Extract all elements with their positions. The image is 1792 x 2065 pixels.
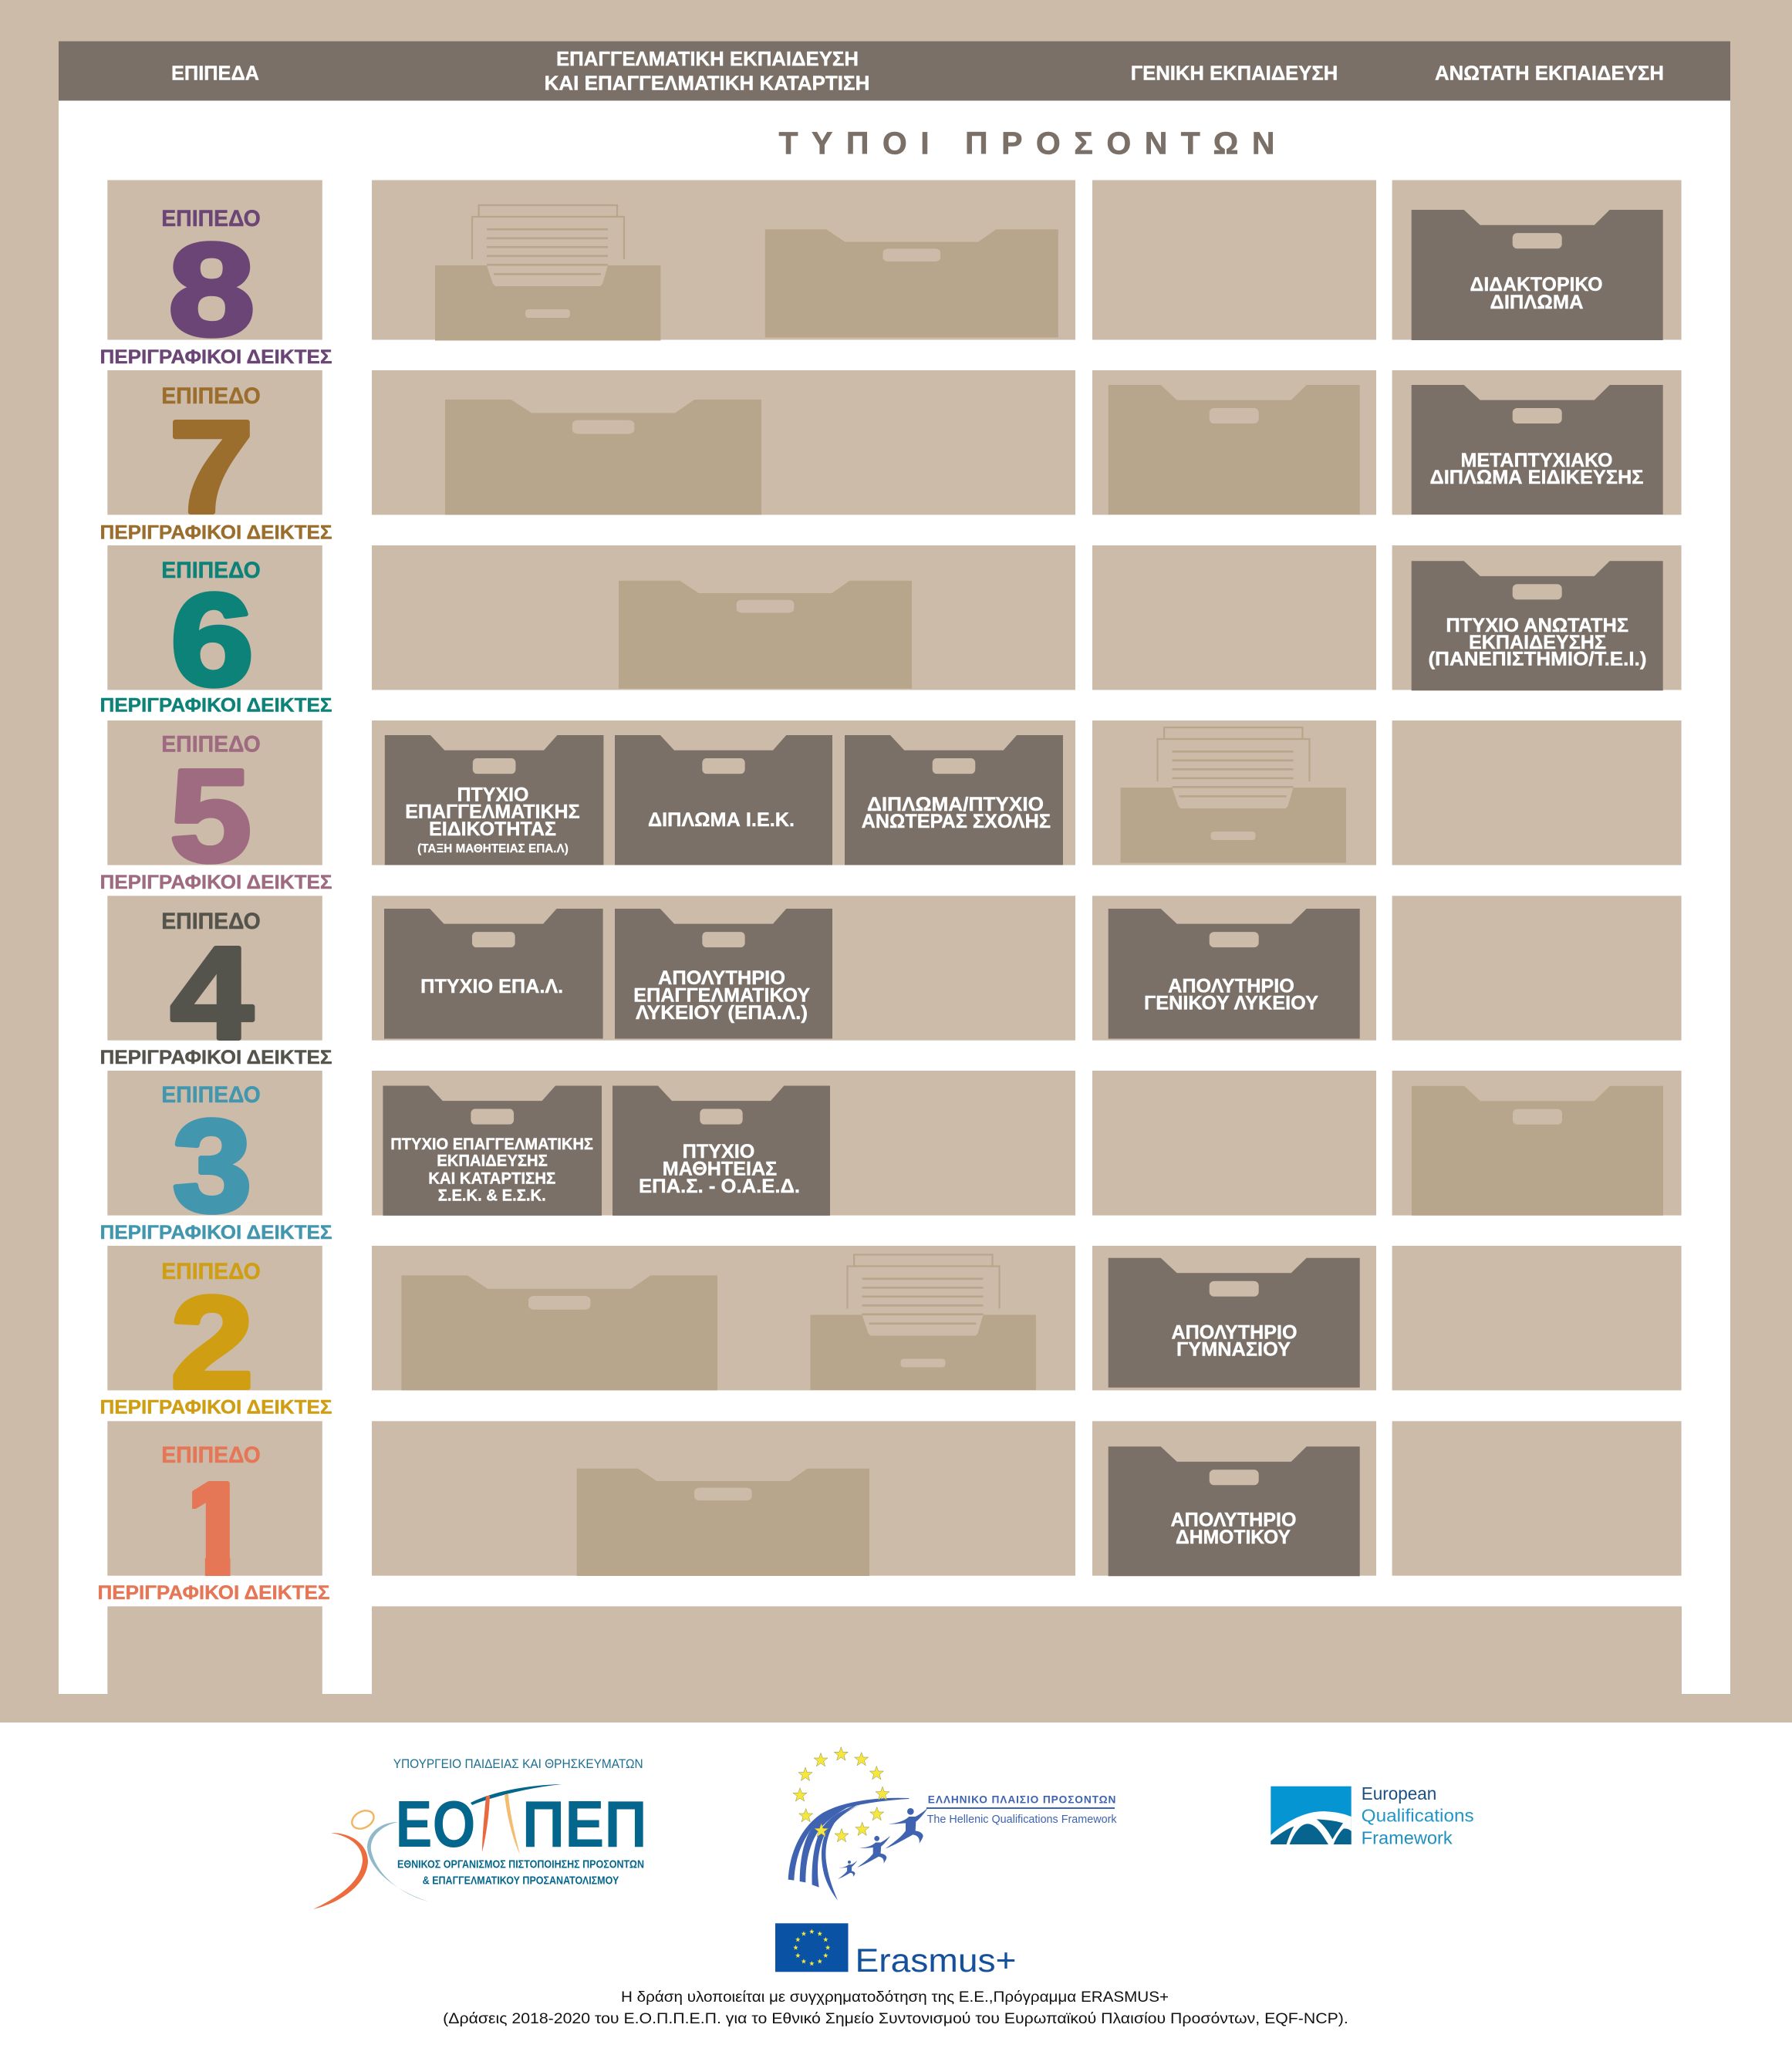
drawer: vocational specialty degree: ΕΠΑΓΓΕΛΜΑΤΙΚΗΣ xyxy=(405,801,580,823)
panel: level 4 xyxy=(100,896,332,1068)
drawer: doctorate: ΔΙΔΑΚΤΟΡΙΚΟ xyxy=(1470,274,1603,295)
icon: closed drawer, level 6 vocational xyxy=(619,581,912,689)
drawer: higher school diploma: ΑΝΩΤΕΡΑΣ ΣΧΟΛΗΣ xyxy=(862,811,1051,832)
panel: level 3 general xyxy=(1092,1071,1376,1216)
panel: level 5 higher xyxy=(1392,720,1682,865)
drawer: general lyceum certificate xyxy=(1109,909,1360,1039)
drawer: IEK diploma: ΔΙΠΛΩΜΑ Ι.Ε.Κ. xyxy=(648,809,795,831)
drawer: apprenticeship degree xyxy=(613,1086,830,1216)
logo: EOPPEP xyxy=(313,1757,647,1909)
header bar: ΕΠΙΠΕΔΑ xyxy=(171,62,259,85)
drawer: IEK diploma xyxy=(615,735,832,865)
panel: level 6 higher xyxy=(1392,545,1682,690)
logo: Hellenic Qualifications Framework xyxy=(788,1747,1117,1900)
panel: level 1 higher xyxy=(1392,1421,1682,1576)
funding note xyxy=(443,1989,1348,2027)
panel: level 1 vocational xyxy=(372,1421,1075,1576)
panel: level 6: 6 xyxy=(170,567,254,714)
logo: EOPPEP: ΕΘΝΙΚΟΣ ΟΡΓΑΝΙΣΜΟΣ ΠΙΣΤΟΠΟΙΗΣΗΣ ΠΡΟΣΟΝΤΩΝ xyxy=(397,1858,644,1871)
panel: level 5: ΕΠΙΠΕΔΟ xyxy=(161,731,261,758)
drawer: vocational training degree SEK ESK: ΚΑΙ ΚΑΤΑΡΤΙΣΗΣ xyxy=(428,1169,555,1187)
panel: level 6: ΕΠΙΠΕΔΟ xyxy=(161,558,261,583)
icon: closed drawer, level 3 higher xyxy=(1412,1086,1663,1216)
funding note: (Δράσεις 2018-2020 του Ε.Ο.Π.Π.Ε.Π. για το Εθνικό Σημείο Συντονισμού του Ευρωπαϊκού Πλαισίου Προσόντων, EQF-NCP). xyxy=(443,2011,1348,2027)
panel: level 1: 1 xyxy=(176,1456,253,1602)
panel: level 8 xyxy=(100,181,332,368)
logo: European Qualifications Framework xyxy=(1271,1783,1474,1848)
panel: level 7 general xyxy=(1092,370,1376,515)
logo: Hellenic Qualifications Framework: ΕΛΛΗΝΙΚΟ ΠΛΑΙΣΙΟ ΠΡΟΣΟΝΤΩΝ xyxy=(928,1793,1115,1805)
drawer: higher education degree: (ΠΑΝΕΠΙΣΤΗΜΙΟ/Τ.Ε.Ι.) xyxy=(1429,649,1646,670)
drawer: EPAL certificate: ΕΠΑΓΓΕΛΜΑΤΙΚΟΥ xyxy=(633,985,810,1007)
panel: level 4 higher xyxy=(1392,896,1682,1041)
header bar: ΕΠΑΓΓΕΛΜΑΤΙΚΗ ΕΚΠΑΙΔΕΥΣΗ xyxy=(556,47,859,70)
logo: Erasmus+: Erasmus+ xyxy=(855,1942,1017,1979)
panel: level 3 vocational xyxy=(372,1071,1075,1216)
panel: level 6: ΠΕΡΙΓΡΑΦΙΚΟΙ ΔΕΙΚΤΕΣ xyxy=(100,695,332,717)
logo: EOPPEP: ΠΕΠ xyxy=(522,1788,647,1861)
logo: Erasmus+ xyxy=(775,1923,1017,1979)
panel: level 7 higher xyxy=(1392,370,1682,515)
panel: level 4: 4 xyxy=(170,920,253,1067)
drawer: vocational training degree SEK ESK: ΠΤΥΧΙΟ ΕΠΑΓΓΕΛΜΑΤΙΚΗΣ xyxy=(390,1135,593,1153)
panel: level 3 xyxy=(100,1071,332,1243)
panel: level 6 general xyxy=(1092,545,1376,690)
panel: level 8: ΠΕΡΙΓΡΑΦΙΚΟΙ ΔΕΙΚΤΕΣ xyxy=(100,346,332,368)
panel: level 4: ΕΠΙΠΕΔΟ xyxy=(161,909,261,934)
drawer: higher education degree: ΕΚΠΑΙΔΕΥΣΗΣ xyxy=(1469,632,1606,653)
panel: level 5: ΠΕΡΙΓΡΑΦΙΚΟΙ ΔΕΙΚΤΕΣ xyxy=(100,872,332,893)
drawer: gymnasium certificate: ΑΠΟΛΥΤΗΡΙΟ xyxy=(1171,1322,1298,1344)
drawer: vocational training degree SEK ESK: ΕΚΠΑΙΔΕΥΣΗΣ xyxy=(437,1151,548,1169)
panel: level 8 vocational xyxy=(372,181,1075,339)
panel: level 1: ΕΠΙΠΕΔΟ xyxy=(161,1442,261,1468)
logo: EOPPEP: & ΕΠΑΓΓΕΛΜΑΤΙΚΟΥ ΠΡΟΣΑΝΑΤΟΛΙΣΜΟΥ xyxy=(423,1874,619,1888)
header bar: ΓΕΝΙΚΗ ΕΚΠΑΙΔΕΥΣΗ xyxy=(1131,62,1338,85)
panel: level 2 vocational xyxy=(372,1246,1075,1390)
icon: closed drawer, level 7 general xyxy=(1109,385,1360,515)
drawer: primary school certificate xyxy=(1109,1446,1360,1576)
panel: level 5: 5 xyxy=(170,743,251,889)
drawer: higher school diploma xyxy=(845,735,1063,865)
panel: level 2: ΕΠΙΠΕΔΟ xyxy=(161,1259,261,1284)
header bar xyxy=(59,42,1730,100)
panel: level 3: ΠΕΡΙΓΡΑΦΙΚΟΙ ΔΕΙΚΤΕΣ xyxy=(100,1222,332,1243)
panel: level 6 xyxy=(100,545,332,717)
panel: level 8: ΕΠΙΠΕΔΟ xyxy=(161,206,261,231)
logo: Hellenic Qualifications Framework: The Hellenic Qualifications Framework xyxy=(927,1814,1117,1826)
panel: level 3: 3 xyxy=(173,1093,251,1240)
panel: level 3: ΕΠΙΠΕΔΟ xyxy=(161,1082,261,1108)
logo: European Qualifications Framework: European xyxy=(1362,1783,1436,1804)
panel: level 8: 8 xyxy=(168,217,255,363)
drawer: vocational training degree SEK ESK: Σ.Ε.Κ. & Ε.Σ.Κ. xyxy=(438,1186,546,1205)
panel: level 2 general xyxy=(1092,1246,1376,1390)
logo: EOPPEP: ΥΠΟΥΡΓΕΙΟ ΠΑΙΔΕΙΑΣ ΚΑΙ ΘΡΗΣΚΕΥΜΑΤΩΝ xyxy=(393,1757,643,1771)
icon: closed drawer, level 7 vocational xyxy=(445,400,761,515)
panel: level 2 xyxy=(100,1246,332,1418)
panel: level 5 general xyxy=(1092,720,1376,865)
drawer: EPAL certificate: ΛΥΚΕΙΟΥ (ΕΠΑ.Λ.) xyxy=(636,1002,808,1024)
panel: bottom wide cell xyxy=(372,1606,1682,1699)
drawer: higher school diploma: ΔΙΠΛΩΜΑ/ΠΤΥΧΙΟ xyxy=(867,794,1044,815)
drawer: postgraduate diploma xyxy=(1412,385,1663,515)
logo: European Qualifications Framework: Framework xyxy=(1362,1828,1453,1848)
panel: level 8 general xyxy=(1092,181,1376,339)
header bar: ΑΝΩΤΑΤΗ ΕΚΠΑΙΔΕΥΣΗ xyxy=(1435,62,1664,85)
logo: EOPPEP: ΕΟ xyxy=(395,1788,475,1861)
panel: level 4: ΠΕΡΙΓΡΑΦΙΚΟΙ ΔΕΙΚΤΕΣ xyxy=(100,1047,332,1068)
drawer: vocational specialty degree: ΕΙΔΙΚΟΤΗΤΑΣ xyxy=(429,818,556,840)
panel: level 7 vocational xyxy=(372,370,1075,515)
drawer: EPAL certificate xyxy=(615,909,832,1039)
icon: closed drawer, level 1 vocational xyxy=(577,1469,869,1576)
drawer: vocational specialty degree xyxy=(385,735,603,865)
panel: level 1 general xyxy=(1092,1421,1376,1576)
panel: level 7: ΠΕΡΙΓΡΑΦΙΚΟΙ ΔΕΙΚΤΕΣ xyxy=(100,522,332,544)
panel: level 5 vocational xyxy=(372,720,1075,865)
drawer: higher education degree: ΠΤΥΧΙΟ ΑΝΩΤΑΤΗΣ xyxy=(1446,615,1628,636)
panel: level 5 xyxy=(100,720,332,893)
drawer: doctorate: ΔΙΠΛΩΜΑ xyxy=(1490,292,1583,313)
drawer: primary school certificate: ΔΗΜΟΤΙΚΟΥ xyxy=(1176,1527,1291,1548)
icon: open drawer with papers, level 8 xyxy=(435,205,660,341)
drawer: general lyceum certificate: ΓΕΝΙΚΟΥ ΛΥΚΕΙΟΥ xyxy=(1144,993,1318,1014)
drawer: EPAL certificate: ΑΠΟΛΥΤΗΡΙΟ xyxy=(658,967,785,989)
panel: level 8 higher xyxy=(1392,181,1682,339)
drawer: gymnasium certificate xyxy=(1109,1258,1360,1388)
panel: level 7: ΕΠΙΠΕΔΟ xyxy=(161,383,261,409)
panel: level 1 xyxy=(97,1421,330,1604)
drawer: apprenticeship degree: ΜΑΘΗΤΕΙΑΣ xyxy=(663,1159,777,1180)
panel: level 7: 7 xyxy=(169,394,254,541)
drawer: EPAL degree xyxy=(384,909,603,1039)
drawer: apprenticeship degree: ΕΠΑ.Σ. - Ο.Α.Ε.Δ. xyxy=(639,1176,800,1197)
drawer: vocational training degree SEK ESK xyxy=(383,1086,602,1216)
panel: level 2: 2 xyxy=(170,1270,254,1416)
drawer: postgraduate diploma: ΜΕΤΑΠΤΥΧΙΑΚΟ xyxy=(1461,450,1612,471)
drawer: general lyceum certificate: ΑΠΟΛΥΤΗΡΙΟ xyxy=(1168,976,1294,997)
panel: level 4 general xyxy=(1092,896,1376,1041)
panel: level 4 vocational xyxy=(372,896,1075,1041)
drawer: primary school certificate: ΑΠΟΛΥΤΗΡΙΟ xyxy=(1171,1510,1296,1531)
drawer: gymnasium certificate: ΓΥΜΝΑΣΙΟΥ xyxy=(1176,1339,1291,1361)
funding note: Η δράση υλοποιείται με συγχρηματοδότηση της Ε.Ε.,Πρόγραμμα ERASMUS+ xyxy=(621,1989,1169,2006)
logo: European Qualifications Framework: Qualifications xyxy=(1362,1806,1474,1826)
title: ΤΥΠΟΙ ΠΡΟΣΟΝΤΩΝ xyxy=(779,125,1274,160)
icon: closed drawer, level 8 vocational xyxy=(765,229,1058,337)
drawer: postgraduate diploma: ΔΙΠΛΩΜΑ ΕΙΔΙΚΕΥΣΗΣ xyxy=(1430,467,1643,488)
icon: open drawer with papers, level 5 xyxy=(1120,727,1346,862)
drawer: apprenticeship degree: ΠΤΥΧΙΟ xyxy=(683,1141,754,1162)
panel: level 7 xyxy=(100,370,332,544)
drawer: doctorate xyxy=(1412,210,1663,340)
drawer: vocational specialty degree: (ΤΑΞΗ ΜΑΘΗΤΕΙΑΣ ΕΠΑ.Λ) xyxy=(417,842,569,855)
panel: level 2: ΠΕΡΙΓΡΑΦΙΚΟΙ ΔΕΙΚΤΕΣ xyxy=(100,1396,332,1418)
icon: closed drawer, level 2 vocational xyxy=(401,1275,717,1390)
drawer: EPAL degree: ΠΤΥΧΙΟ ΕΠΑ.Λ. xyxy=(420,976,563,997)
panel: level 1: ΠΕΡΙΓΡΑΦΙΚΟΙ ΔΕΙΚΤΕΣ xyxy=(97,1582,330,1604)
drawer: higher education degree xyxy=(1412,561,1663,690)
panel: level 2 higher xyxy=(1392,1246,1682,1390)
panel: level 6 vocational xyxy=(372,545,1075,690)
drawer: vocational specialty degree: ΠΤΥΧΙΟ xyxy=(457,784,529,805)
icon: open drawer with papers, level 2 xyxy=(810,1254,1036,1390)
header bar: ΚΑΙ ΕΠΑΓΓΕΛΜΑΤΙΚΗ ΚΑΤΑΡΤΙΣΗ xyxy=(545,71,869,94)
panel: bottom level cell xyxy=(107,1606,322,1699)
panel: level 3 higher xyxy=(1392,1071,1682,1216)
